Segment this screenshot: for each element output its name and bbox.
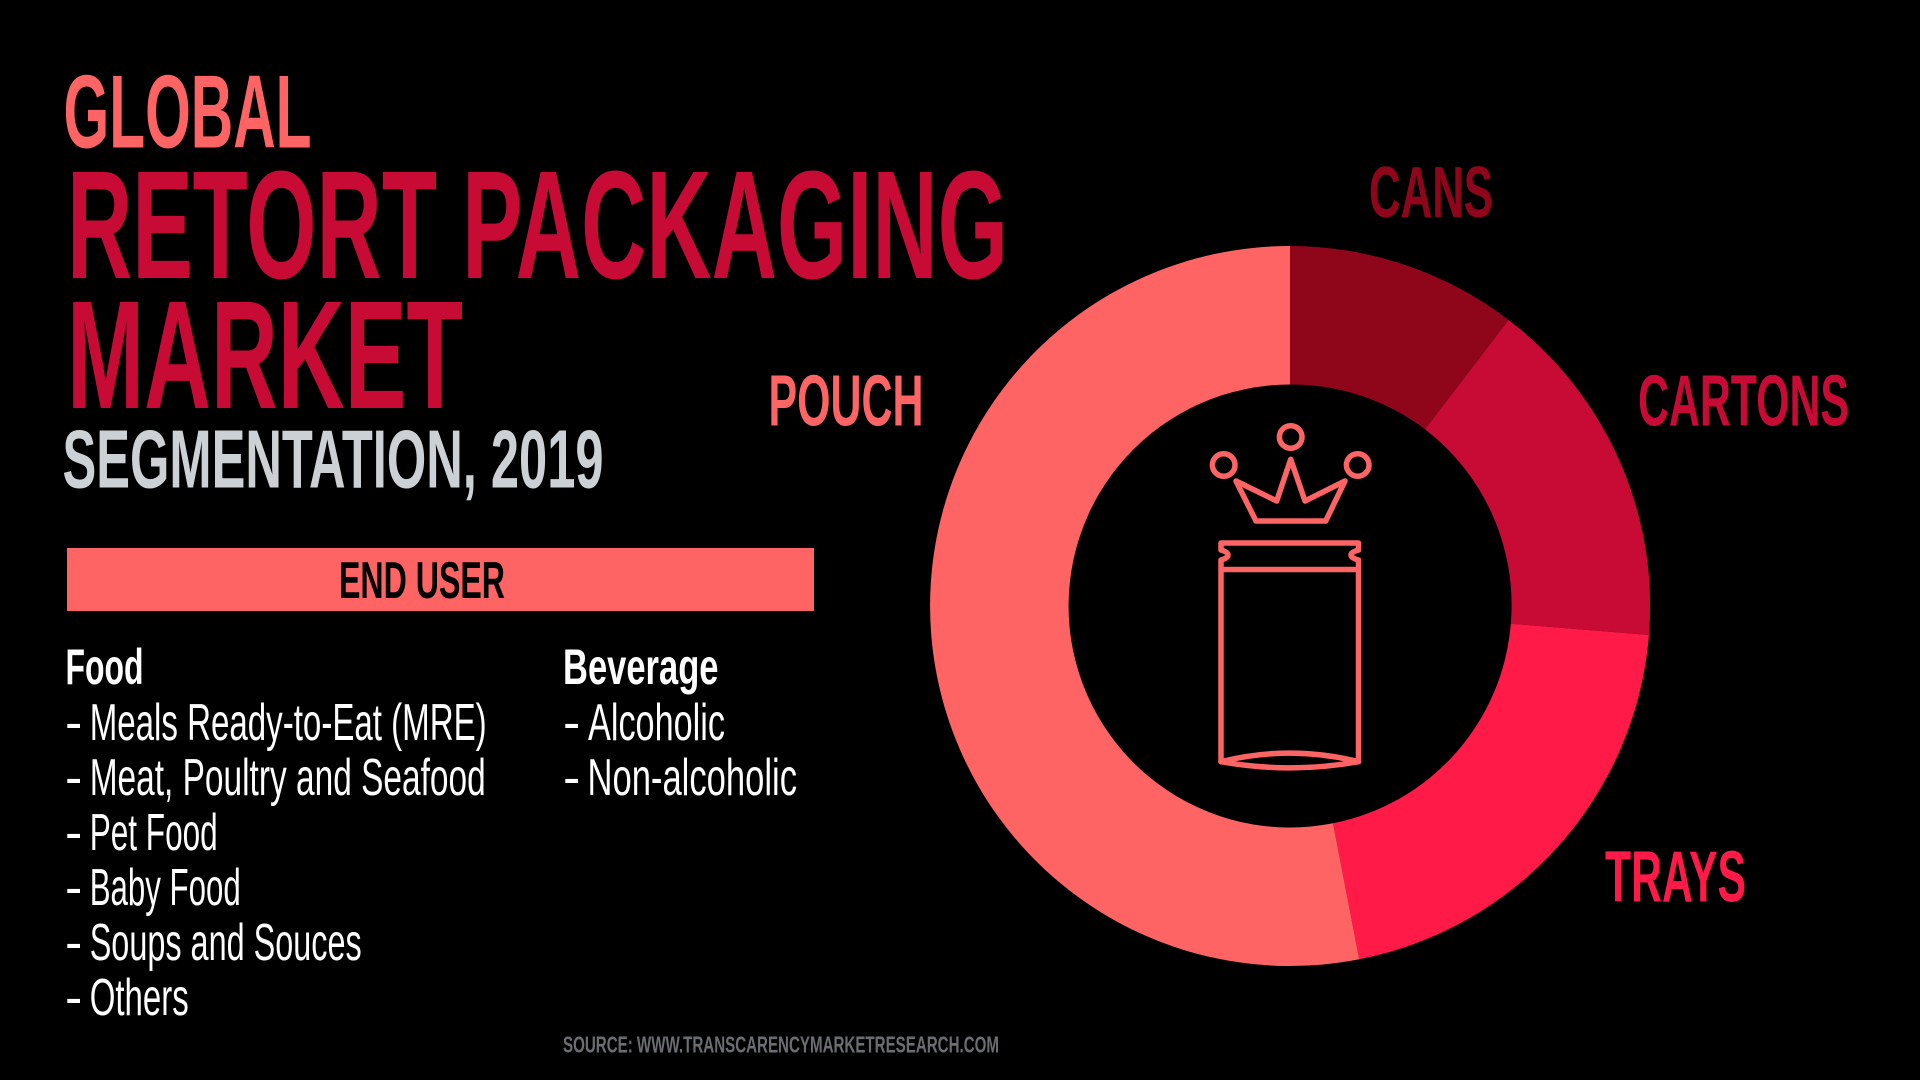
- food list: [65, 639, 487, 1027]
- food list: Soups and Souces: [90, 914, 362, 972]
- segment: trays: [1333, 624, 1649, 959]
- title line: retort packaging: RETORT PACKAGING: [67, 139, 1008, 311]
- food list: -: [65, 969, 82, 1027]
- food list: Food: [66, 639, 144, 695]
- food list: -: [65, 694, 82, 752]
- icon: pouch: [1221, 543, 1358, 768]
- food list: Pet Food: [90, 804, 218, 862]
- beverage list: -: [563, 694, 580, 752]
- label: cans: CANS: [1369, 153, 1493, 233]
- segment: cans: [1290, 246, 1509, 429]
- food list: -: [65, 859, 82, 917]
- beverage list: -: [563, 749, 580, 807]
- segment: cartons: [1425, 320, 1650, 635]
- food list: -: [65, 749, 82, 807]
- icon: crown: [1212, 426, 1369, 521]
- end user header bar: [67, 548, 814, 611]
- food list: Baby Food: [90, 859, 241, 917]
- title line: market: MARKET: [67, 269, 463, 441]
- donut chart: [930, 246, 1650, 966]
- title line: segmentation: SEGMENTATION, 2019: [62, 412, 604, 506]
- title: [62, 54, 1008, 506]
- icon: crowned retort pouch: [1212, 426, 1369, 768]
- title line: global: GLOBAL: [64, 54, 312, 170]
- food list: Others: [90, 969, 189, 1027]
- food list: -: [65, 804, 82, 862]
- segment: pouch: [930, 246, 1359, 966]
- beverage list: Alcoholic: [588, 694, 725, 752]
- label: trays: TRAYS: [1605, 838, 1746, 918]
- food list: Meals Ready-to-Eat (MRE): [90, 694, 487, 752]
- food list: Meat, Poultry and Seafood: [90, 749, 486, 807]
- beverage list: Non-alcoholic: [588, 749, 797, 807]
- food list: -: [65, 914, 82, 972]
- label: pouch: POUCH: [768, 362, 924, 442]
- end user header bar: END USER: [339, 552, 505, 610]
- source note: SOURCE: WWW.TRANSCARENCYMARKETRESEARCH.COM: [563, 1032, 999, 1058]
- beverage list: Beverage: [563, 639, 718, 695]
- beverage list: [563, 639, 797, 807]
